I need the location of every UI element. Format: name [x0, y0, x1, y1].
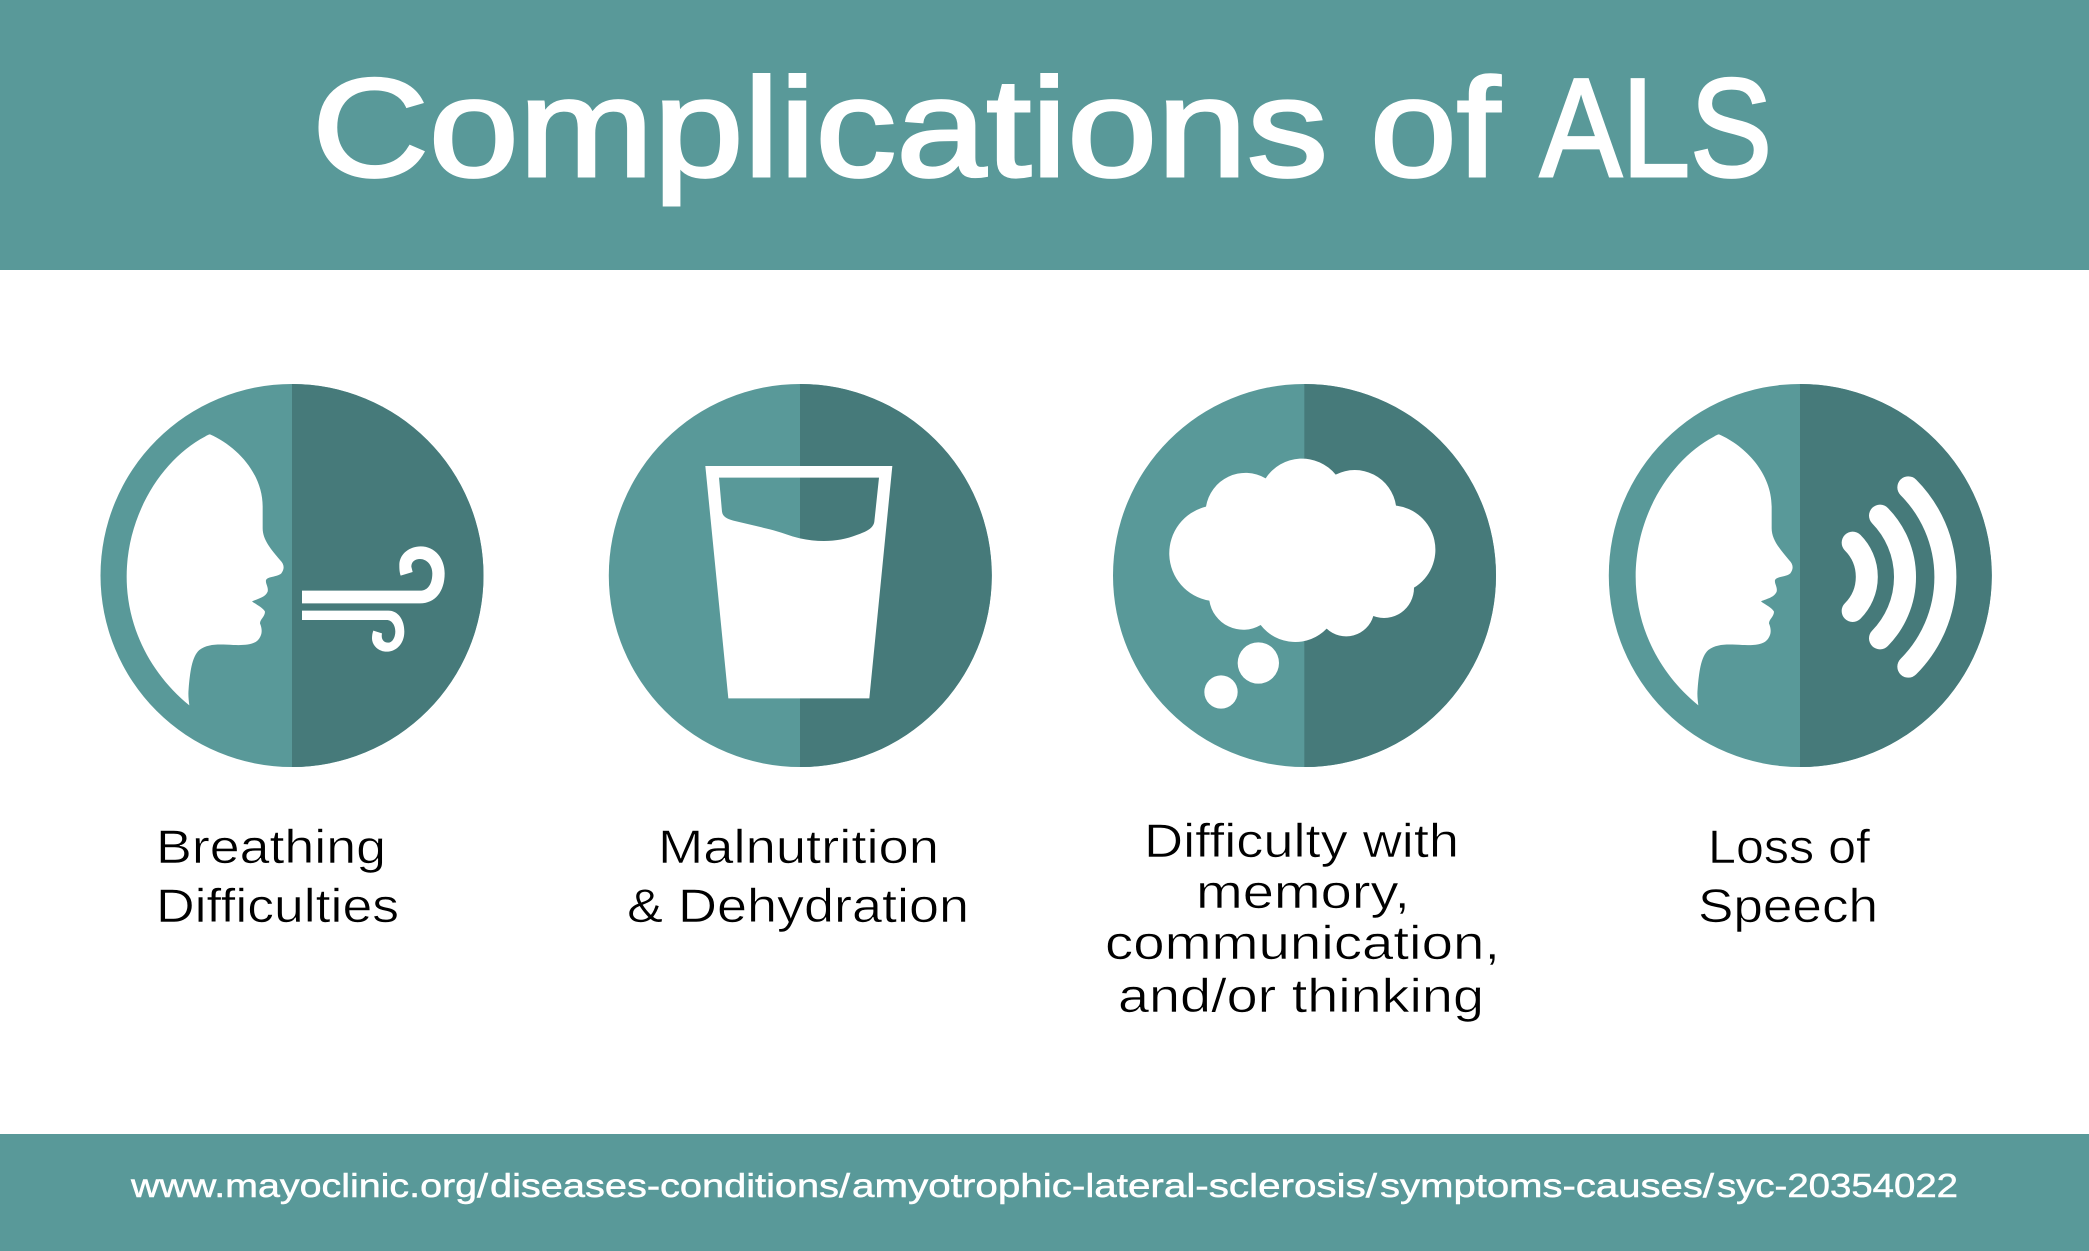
label: difficulty with memory, communication, thinking	[1105, 814, 1500, 1022]
source url: symptoms-causes/	[1380, 1167, 1715, 1204]
title	[312, 49, 1772, 206]
source url: syc-20354022	[1717, 1167, 1958, 1204]
label: difficulty with memory, communication, thinking: Difficulty with	[1144, 814, 1459, 867]
source url: diseases-conditions/	[490, 1167, 851, 1204]
label: malnutrition and dehydration: & Dehydration	[627, 879, 969, 932]
footer banner	[0, 1134, 2089, 1251]
panel: loss of speech	[1609, 384, 1992, 932]
icon: face speaking with sound waves	[1609, 384, 1992, 767]
label: breathing difficulties: Difficulties	[156, 879, 399, 932]
source url: www.mayoclinic.org/	[130, 1167, 489, 1204]
panel: malnutrition and dehydration	[609, 384, 992, 932]
title: ALS	[1540, 49, 1772, 206]
label: loss of speech: Speech	[1698, 879, 1878, 932]
title: of	[1370, 49, 1501, 206]
label: breathing difficulties: Breathing	[156, 820, 386, 873]
icon: thought bubble	[1113, 384, 1496, 767]
label: difficulty with memory, communication, thinking: memory,	[1196, 865, 1410, 918]
icon: face exhaling air	[100, 384, 484, 767]
label: malnutrition and dehydration	[627, 820, 969, 932]
icon: glass of water	[609, 384, 992, 767]
label: difficulty with memory, communication, thinking: and/or thinking	[1118, 969, 1484, 1022]
panel: difficulty with memory, communication, thinking	[1105, 384, 1500, 1022]
label: loss of speech	[1698, 820, 1878, 932]
label: malnutrition and dehydration: Malnutrition	[658, 820, 939, 873]
title: Complications	[312, 49, 1328, 206]
header banner	[0, 0, 2089, 270]
source url: amyotrophic-lateral-sclerosis/	[852, 1167, 1378, 1204]
source url	[130, 1167, 1958, 1204]
panel: breathing difficulties	[100, 384, 484, 932]
label: difficulty with memory, communication, thinking: communication,	[1105, 916, 1500, 969]
label: breathing difficulties	[156, 820, 399, 932]
label: loss of speech: Loss of	[1708, 820, 1871, 873]
